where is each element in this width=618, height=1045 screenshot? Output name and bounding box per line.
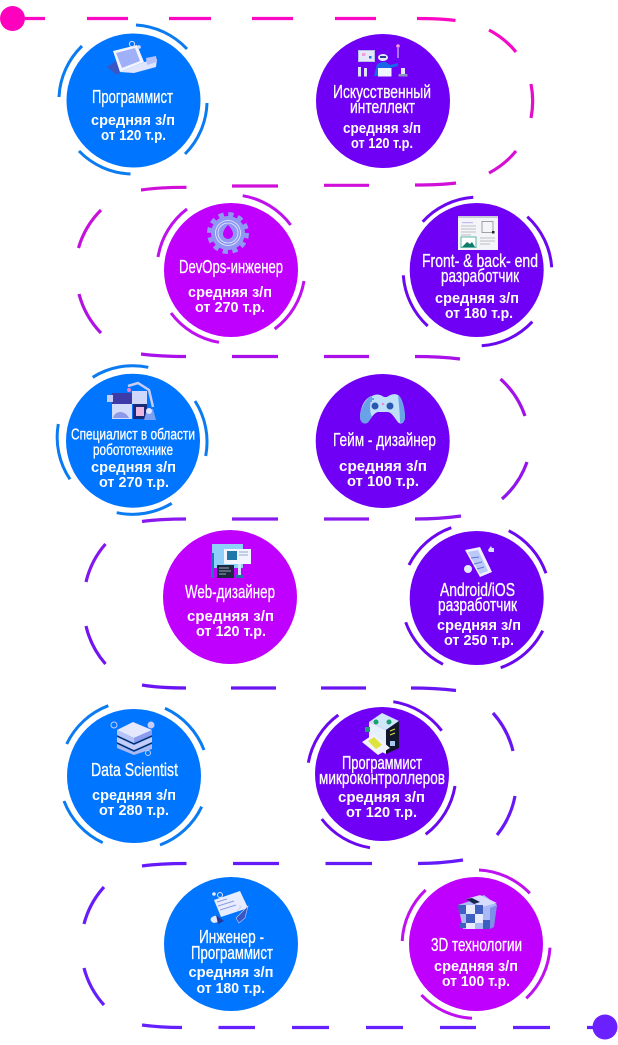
icon: server stack xyxy=(111,722,154,756)
circle xyxy=(66,34,200,168)
icon: engineering document xyxy=(211,891,248,924)
orbit rings xyxy=(406,528,546,668)
salary: средняя з/п xyxy=(435,291,519,307)
icon: 3D cube xyxy=(458,895,497,929)
job title: Искусственный xyxy=(333,81,431,102)
job title xyxy=(422,250,538,286)
salary xyxy=(437,618,521,649)
salary: средняя з/п xyxy=(91,460,176,476)
circle xyxy=(67,709,201,843)
panel: Программист микроконтроллеров xyxy=(308,702,455,848)
orbit rings xyxy=(402,870,550,1018)
job title: Инженер - xyxy=(199,926,264,947)
orbit rings xyxy=(403,197,552,346)
salary: от 120 т.р. xyxy=(101,128,166,144)
circle xyxy=(164,877,298,1011)
salary: от 270 т.р. xyxy=(99,475,169,491)
job title xyxy=(438,579,518,615)
job title: Android/iOS xyxy=(440,579,515,600)
orbit rings xyxy=(59,25,207,174)
salary: от 250 т.р. xyxy=(444,633,514,649)
circle xyxy=(164,203,298,337)
job title xyxy=(191,926,273,963)
icon: web design screens xyxy=(211,544,251,578)
salary xyxy=(187,609,274,640)
salary: от 120 т.р. xyxy=(351,136,413,152)
salary xyxy=(434,959,518,990)
icon: robot arm collage xyxy=(107,383,156,420)
panel: Android/iOS разработчик xyxy=(406,528,546,668)
panel: Front- & back- end разработчик xyxy=(403,197,552,346)
salary: от 270 т.р. xyxy=(195,300,265,316)
salary: средняя з/п xyxy=(188,285,272,301)
salary: средняя з/п xyxy=(188,965,274,981)
job title: 3D технологии xyxy=(431,934,522,955)
panel: Искусственный интеллект xyxy=(316,34,450,168)
salary: от 120 т.р. xyxy=(196,624,266,640)
icon: gear xyxy=(210,214,246,252)
salary xyxy=(339,459,427,490)
salary: средняя з/п xyxy=(92,788,176,804)
job title: Программист xyxy=(342,752,422,773)
job title: микроконтроллеров xyxy=(319,767,445,788)
circle xyxy=(409,877,543,1011)
panel: 3D технологии xyxy=(402,870,550,1018)
job title: интеллект xyxy=(350,96,415,117)
job title xyxy=(333,81,431,117)
end dot xyxy=(592,1014,618,1040)
icon: laptop xyxy=(107,41,157,75)
salary: от 100 т.р. xyxy=(347,474,419,490)
icon: smartphone xyxy=(464,546,494,577)
salary xyxy=(343,121,421,152)
job title xyxy=(71,426,195,459)
job title: разработчик xyxy=(441,265,520,286)
panel: Data Scientist xyxy=(64,706,204,845)
job title: DevOps-инженер xyxy=(179,256,283,277)
circle xyxy=(316,374,450,508)
salary: от 100 т.р. xyxy=(442,974,510,990)
circle xyxy=(410,531,544,665)
job title: разработчик xyxy=(438,594,518,615)
salary: средняя з/п xyxy=(437,618,521,634)
job title: Гейм - дизайнер xyxy=(333,429,436,450)
salary: от 180 т.р. xyxy=(196,981,265,997)
panel: Инженер-Программист xyxy=(164,877,298,1011)
job title: Web-дизайнер xyxy=(185,581,275,602)
orbit rings xyxy=(64,706,204,845)
salary xyxy=(91,113,175,144)
salary: средняя з/п xyxy=(343,121,421,137)
salary: средняя з/п xyxy=(91,113,175,129)
job title: робототехнике xyxy=(93,442,173,459)
panel: Программист xyxy=(59,25,207,174)
salary xyxy=(92,788,176,819)
salary: средняя з/п xyxy=(338,790,425,806)
job title: Программист xyxy=(191,942,273,963)
panel: Специалист в области робототехнике xyxy=(57,366,207,514)
orbit rings xyxy=(158,196,304,342)
start dot xyxy=(0,6,25,31)
circle xyxy=(316,34,450,168)
icon: web layout document xyxy=(458,216,498,250)
job title xyxy=(319,752,445,788)
salary: от 280 т.р. xyxy=(99,803,169,819)
icon: AI robot at laptop xyxy=(358,44,408,76)
circle xyxy=(66,374,200,508)
icon: isometric server block xyxy=(362,713,399,755)
circle xyxy=(163,530,297,664)
job title: Data Scientist xyxy=(91,759,178,780)
salary: средняя з/п xyxy=(187,609,274,625)
salary: от 180 т.р. xyxy=(445,306,513,322)
job title: Специалист в области xyxy=(71,426,195,444)
salary xyxy=(91,460,176,491)
panel: Web-дизайнер xyxy=(163,530,297,664)
panel: Гейм-дизайнер xyxy=(316,374,450,508)
panel: DevOps-инженер xyxy=(158,196,304,342)
circle xyxy=(410,203,544,337)
salary: от 120 т.р. xyxy=(346,805,417,821)
job title: Программист xyxy=(92,86,173,107)
salary xyxy=(435,291,519,322)
circle xyxy=(315,707,449,841)
salary xyxy=(188,965,274,997)
salary xyxy=(188,285,272,316)
salary: средняя з/п xyxy=(339,459,427,475)
salary xyxy=(338,790,425,821)
icon: gamepad xyxy=(360,394,405,424)
salary: средняя з/п xyxy=(434,959,518,975)
job title: Front- & back- end xyxy=(422,250,538,271)
orbit rings xyxy=(308,702,455,848)
orbit rings xyxy=(57,366,207,514)
